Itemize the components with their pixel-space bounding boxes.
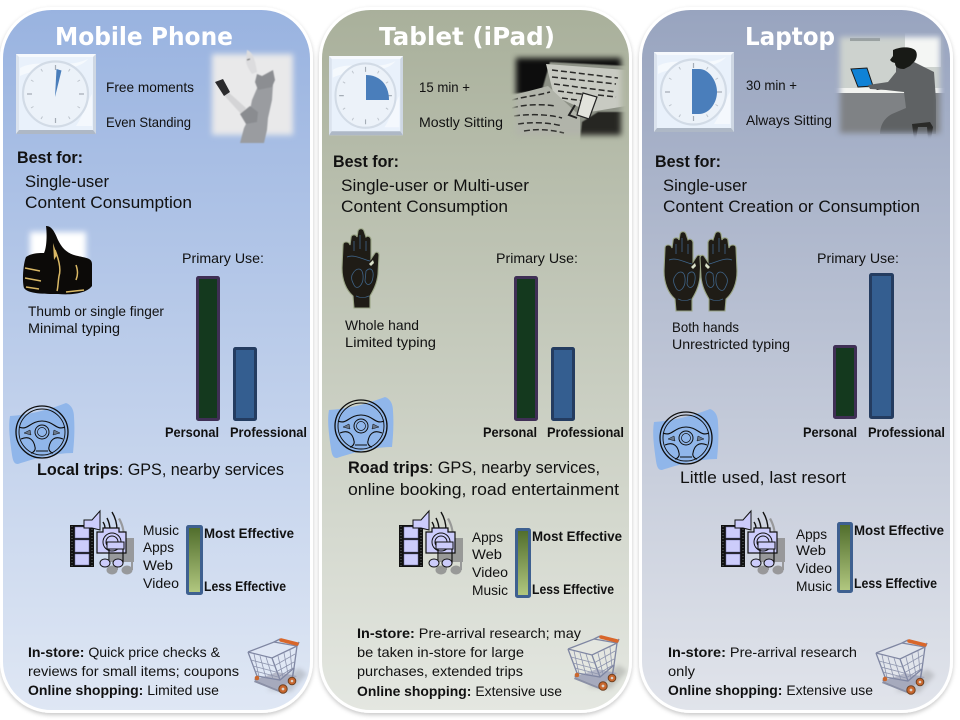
photo: man at laptop <box>836 34 944 138</box>
icon: hand <box>342 229 379 308</box>
panel: mobile phone <box>2 8 312 712</box>
text: shopping <box>28 645 239 698</box>
bar chart: primary use: Primary Use: <box>182 251 264 266</box>
text: thumb usage: Thumb or single finger <box>28 304 164 319</box>
icon: steering wheel <box>653 409 718 470</box>
list: media types: Web <box>796 543 826 558</box>
text: usage moments <box>106 80 194 130</box>
icon: cart <box>876 640 935 694</box>
list: media types <box>796 527 832 594</box>
text: best for: Single-user <box>25 172 109 191</box>
text: hand usage <box>672 320 790 352</box>
text: hand usage: Both hands <box>672 320 739 335</box>
text: trips: Local trips: GPS, nearby services <box>37 460 284 479</box>
text: thumb usage: Minimal typing <box>28 321 120 336</box>
photo: tablet on a couch <box>510 52 628 142</box>
text: best for: Single-user <box>663 176 747 195</box>
text: shopping: Online shopping: Limited use <box>28 683 219 698</box>
list: media types: Web <box>472 547 502 562</box>
text: best for: Content Consumption <box>341 197 508 216</box>
list: media types: Apps <box>143 540 174 555</box>
text: shopping: In-store: Pre-arrival research <box>668 645 857 660</box>
effectiveness scale <box>838 523 944 592</box>
text: shopping: reviews for small items; coupons <box>28 664 239 679</box>
text: usage moments: Mostly Sitting <box>419 115 503 130</box>
text: thumb usage <box>28 304 164 336</box>
icon: media <box>399 511 463 574</box>
heading: mobile phone: Mobile Phone <box>55 22 233 51</box>
text: hand usage: Limited typing <box>345 335 436 350</box>
list: media types: Music <box>143 523 179 538</box>
bar chart: primary use <box>165 251 307 440</box>
heading: tablet: Tablet (iPad) <box>379 22 555 51</box>
text: shopping <box>357 626 581 699</box>
list: media types: Music <box>796 579 832 594</box>
panel: tablet <box>320 8 630 712</box>
list: media types: Music <box>472 583 508 598</box>
text: trips: Little used, last resort <box>680 468 846 487</box>
effectiveness scale <box>188 526 294 594</box>
text: best for <box>333 152 529 216</box>
text: shopping: only <box>668 664 695 679</box>
text: hand usage: Whole hand <box>345 318 419 333</box>
list: media types: Web <box>143 558 173 573</box>
icon: steering wheel <box>9 403 74 464</box>
text: shopping: Online shopping: Extensive use <box>357 684 562 699</box>
text: hand usage: Unrestricted typing <box>672 337 790 352</box>
text: best for: Content Creation or Consumption <box>663 197 920 216</box>
text: usage moments <box>419 80 503 130</box>
bar chart: primary use: Primary Use: <box>817 251 899 266</box>
panel background <box>320 8 630 712</box>
effectiveness scale: Less Effective <box>204 579 286 594</box>
text: usage moments <box>746 78 832 128</box>
text: best for <box>655 152 920 216</box>
list: media types <box>472 530 508 598</box>
text: best for: Content Consumption <box>25 193 192 212</box>
text: trips <box>348 458 619 499</box>
list: media types <box>143 523 179 591</box>
icon: clock with half <box>654 52 734 132</box>
effectiveness scale: Most Effective <box>854 523 944 538</box>
icon: both hands <box>664 232 737 311</box>
text: best for <box>17 148 192 212</box>
list: media types: Video <box>796 561 832 576</box>
panel background <box>640 8 952 712</box>
icon: clock with small wedge <box>16 54 96 134</box>
text: hand usage <box>345 318 436 350</box>
text: best for: Best for: <box>17 148 83 167</box>
icon: cart <box>568 636 627 690</box>
panel: laptop <box>640 8 952 712</box>
bar chart: primary use <box>483 251 624 440</box>
panel background <box>2 8 312 712</box>
bar chart: primary use: Personal <box>483 425 537 440</box>
icon: media <box>721 511 785 574</box>
icon: media <box>70 511 134 574</box>
bar chart: primary use: Professional <box>547 425 624 440</box>
icon: clock with quarter <box>329 56 403 135</box>
text: shopping: be taken in-store for large <box>357 645 524 660</box>
text: shopping: purchases, extended trips <box>357 664 523 679</box>
effectiveness scale: Most Effective <box>204 526 294 541</box>
text: shopping: Online shopping: Extensive use <box>668 683 873 698</box>
photo: standing woman with phone <box>212 50 293 143</box>
text: best for: Single-user or Multi-user <box>341 176 529 195</box>
text: usage moments: 30 min + <box>746 78 797 93</box>
text: usage moments: Free moments <box>106 80 194 95</box>
text: usage moments: Always Sitting <box>746 113 832 128</box>
heading: laptop: Laptop <box>745 22 835 51</box>
bar chart: primary use: Personal <box>803 425 857 440</box>
list: media types: Video <box>472 565 508 580</box>
text: shopping <box>668 645 873 698</box>
bar chart: primary use: Professional <box>230 425 307 440</box>
icon: steering wheel <box>328 397 393 458</box>
effectiveness scale <box>516 529 622 597</box>
bar chart: primary use <box>803 251 945 440</box>
list: media types: Apps <box>796 527 827 542</box>
text: trips: online booking, road entertainment <box>348 480 619 499</box>
text: best for: Best for: <box>333 152 399 171</box>
text: shopping: In-store: Quick price checks & <box>28 645 220 660</box>
bar chart: primary use: Personal <box>165 425 219 440</box>
effectiveness scale: Less Effective <box>854 576 937 591</box>
text: best for: Best for: <box>655 152 721 171</box>
text: trips: Road trips: GPS, nearby services, <box>348 458 600 477</box>
list: media types: Apps <box>472 530 503 545</box>
bar chart: primary use: Professional <box>868 425 945 440</box>
bar chart: primary use: Primary Use: <box>496 251 578 266</box>
icon: thumbs up <box>23 226 92 294</box>
list: media types: Video <box>143 576 179 591</box>
text: usage moments: Even Standing <box>106 115 191 130</box>
effectiveness scale: Less Effective <box>532 582 614 597</box>
icon: cart <box>248 639 307 693</box>
text: usage moments: 15 min + <box>419 80 470 95</box>
text: shopping: In-store: Pre-arrival research; may <box>357 626 581 641</box>
effectiveness scale: Most Effective <box>532 529 622 544</box>
